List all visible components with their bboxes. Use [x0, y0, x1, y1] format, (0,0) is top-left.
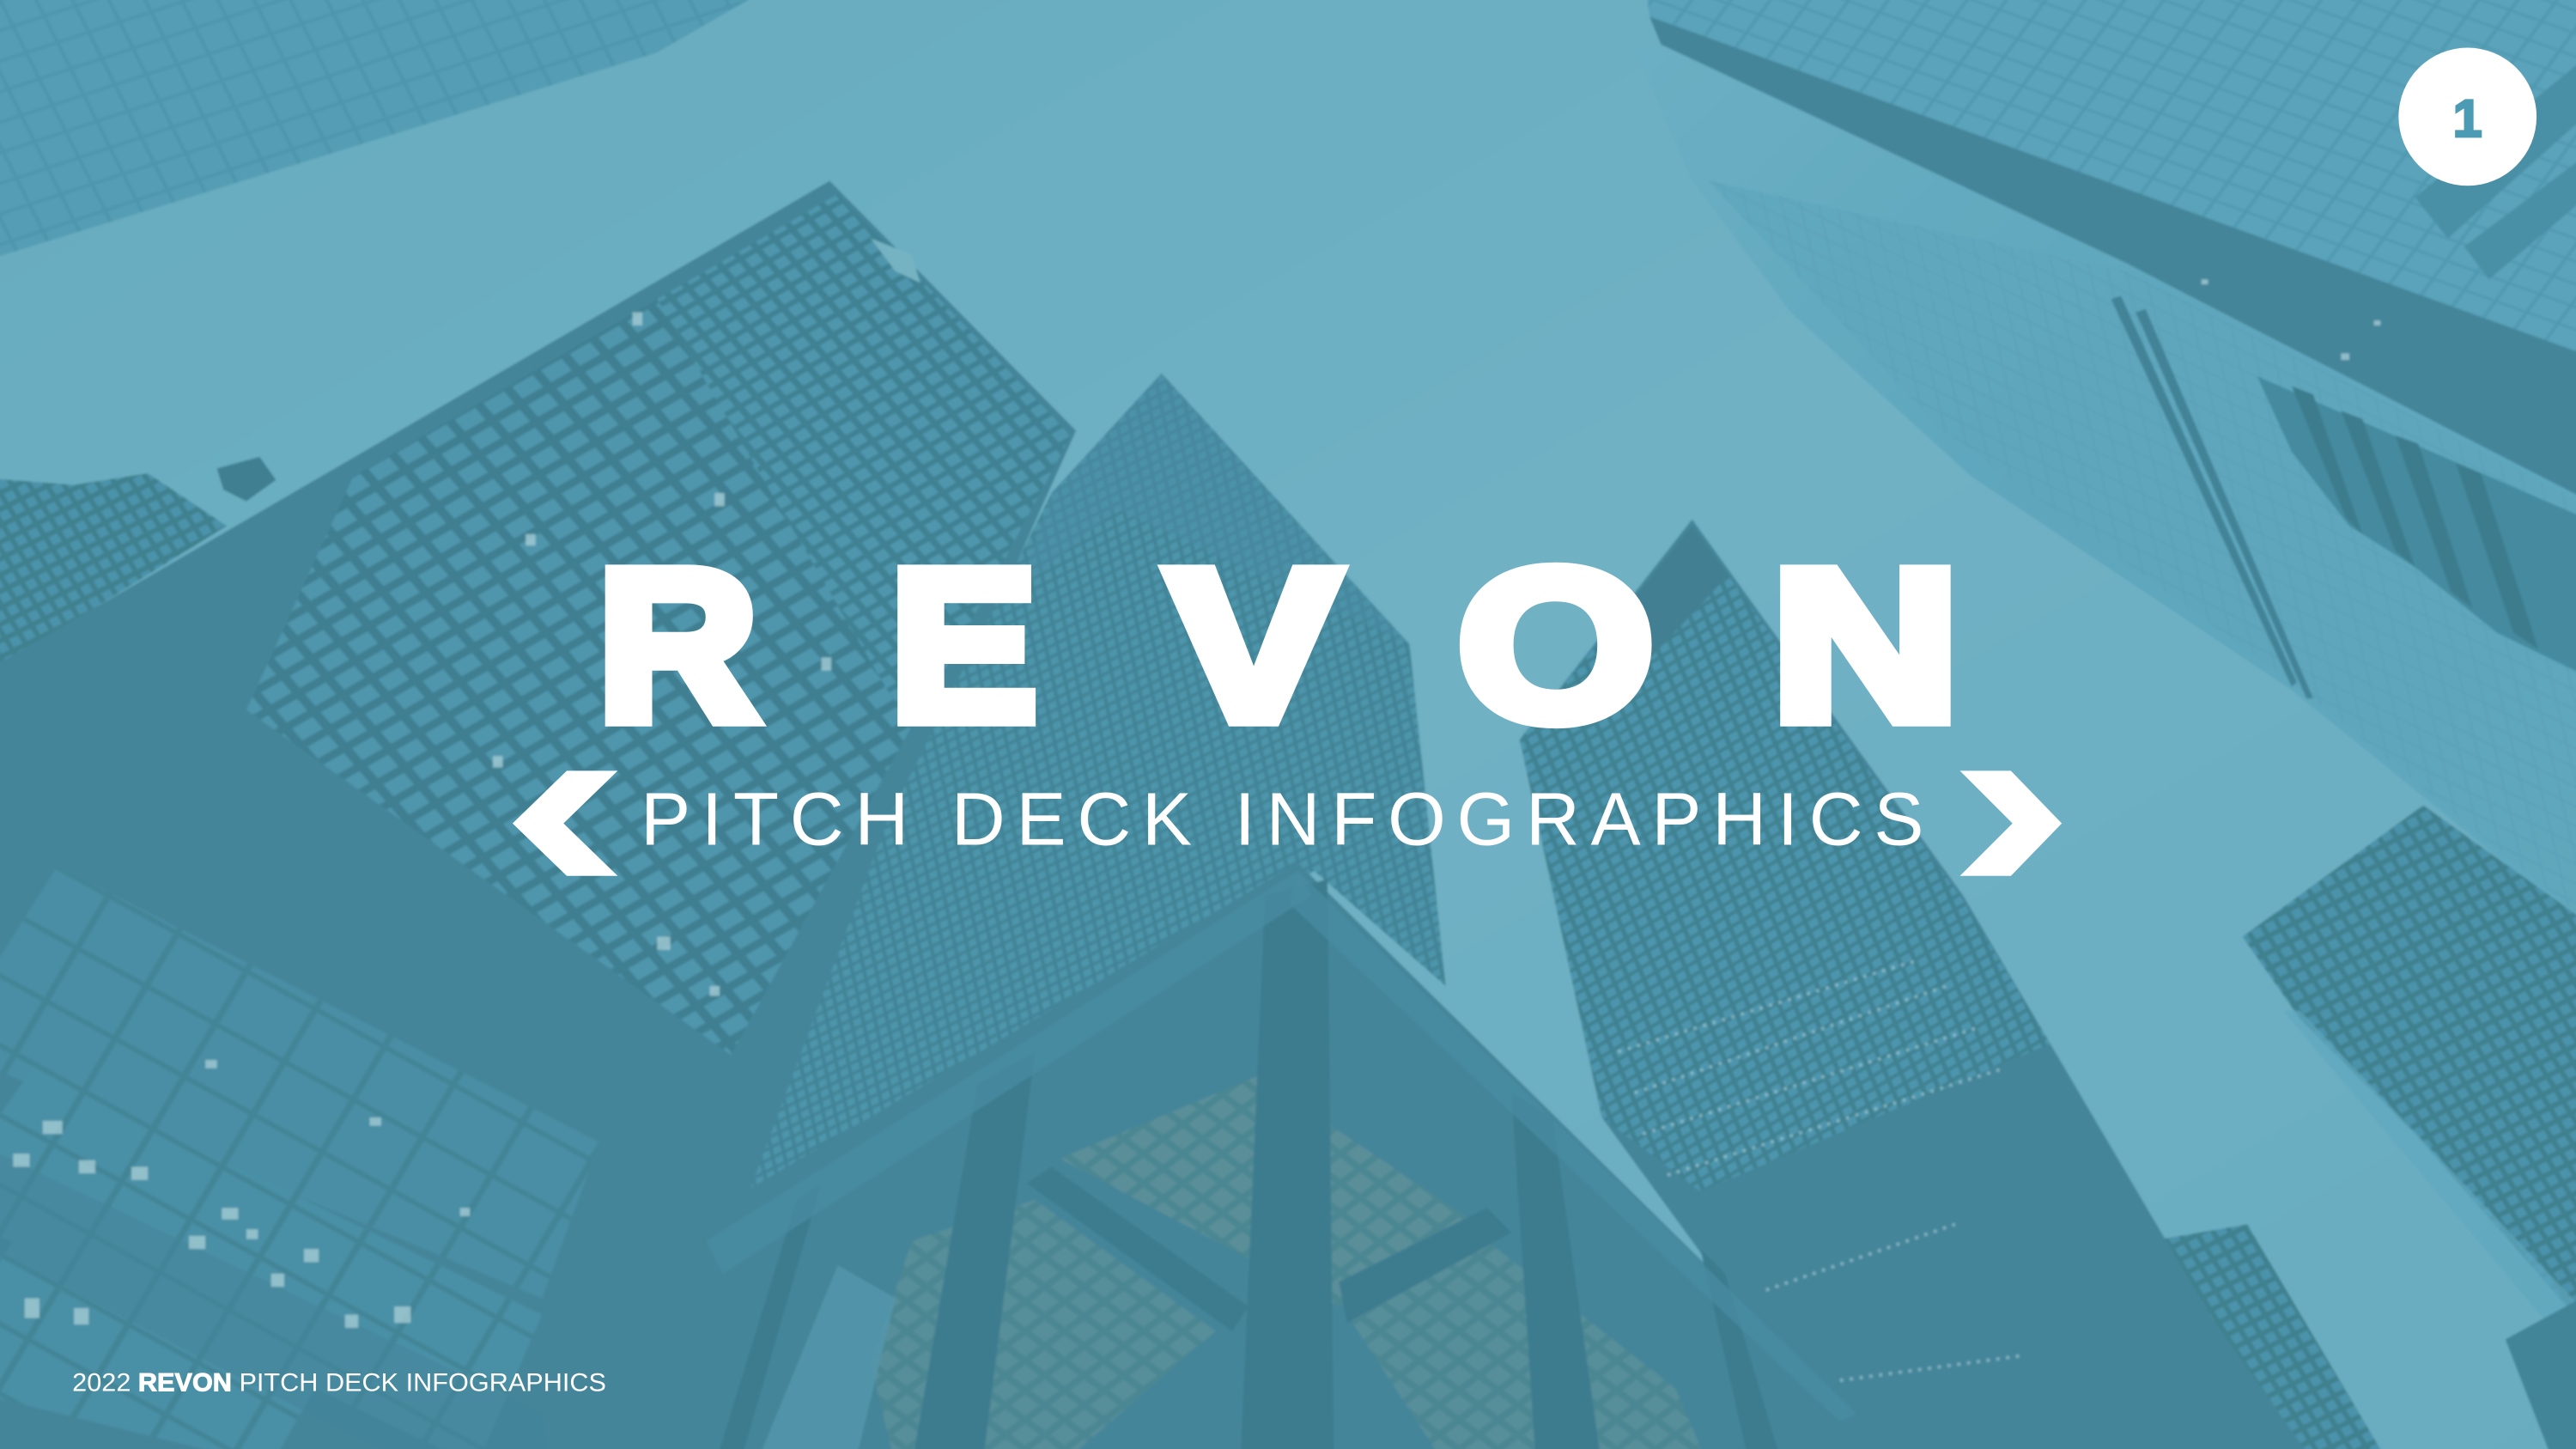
- icon: left chevron: [513, 770, 617, 876]
- lower left window bands: [0, 866, 599, 1449]
- footer text: 2022 REVON PITCH DECK INFOGRAPHICS: [72, 1369, 606, 1397]
- icon: right chevron: [1960, 770, 2062, 876]
- building: main left tower: [0, 180, 1076, 1449]
- building: top left corner: [0, 0, 805, 266]
- building: center tower: [748, 373, 1446, 1196]
- title: REVON: [598, 526, 1959, 764]
- page number badge: [2398, 48, 2537, 186]
- building: upper right shaded face: [1635, 45, 2576, 937]
- title: REVON: N: [1771, 526, 1959, 764]
- building: right tower: [1520, 520, 2317, 1449]
- subtitle with chevrons: [513, 770, 2062, 876]
- title: REVON: V: [1168, 526, 1339, 764]
- building: small distant left: [0, 457, 276, 687]
- page number: 1: [2453, 89, 2482, 148]
- building: upper right roof grid: [1643, 0, 2576, 358]
- building: far right lower: [2152, 806, 2576, 1449]
- subtitle text: PITCH DECK INFOGRAPHICS: [641, 777, 1923, 861]
- front structure: steel frame: [592, 863, 1914, 1449]
- building: upper right dark band: [1649, 16, 2576, 504]
- title: REVON: E: [890, 526, 1036, 764]
- title: REVON: R: [598, 526, 757, 764]
- title: REVON: O: [1458, 526, 1654, 764]
- lit windows: [13, 279, 2380, 1328]
